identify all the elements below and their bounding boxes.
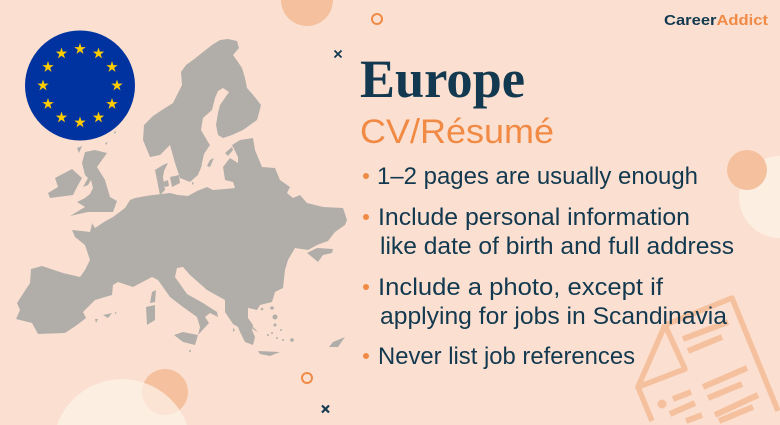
bullet list xyxy=(363,163,734,370)
icon: EU flag xyxy=(25,30,135,140)
Scandinavia and Finland xyxy=(143,39,261,182)
bullet: personal information xyxy=(363,204,734,260)
Ireland xyxy=(48,169,82,198)
title: Europe xyxy=(360,49,525,109)
bullet: photo xyxy=(363,274,728,330)
Mediterranean and Baltic islands xyxy=(77,130,345,356)
bullet: pages: 1–2 pages are usually enough xyxy=(377,163,698,190)
icon: CV document xyxy=(638,298,778,421)
Great Britain xyxy=(70,150,117,216)
mainland Europe xyxy=(16,138,347,345)
logo: CareerAddict: Career Addict xyxy=(664,13,768,29)
bullet: personal information: Include personal information xyxy=(378,204,690,231)
bullet: personal information: like date of birth and full address xyxy=(380,233,734,260)
bullet: photo: Include a photo, except if xyxy=(378,274,663,301)
Denmark xyxy=(155,163,180,195)
bullet: references: Never list job references xyxy=(378,343,635,370)
map of Europe xyxy=(16,39,347,356)
bullet: photo: applying for jobs in Scandinavia xyxy=(380,303,728,330)
subtitle: CV/Résumé xyxy=(360,113,554,151)
Crimea xyxy=(307,248,333,262)
